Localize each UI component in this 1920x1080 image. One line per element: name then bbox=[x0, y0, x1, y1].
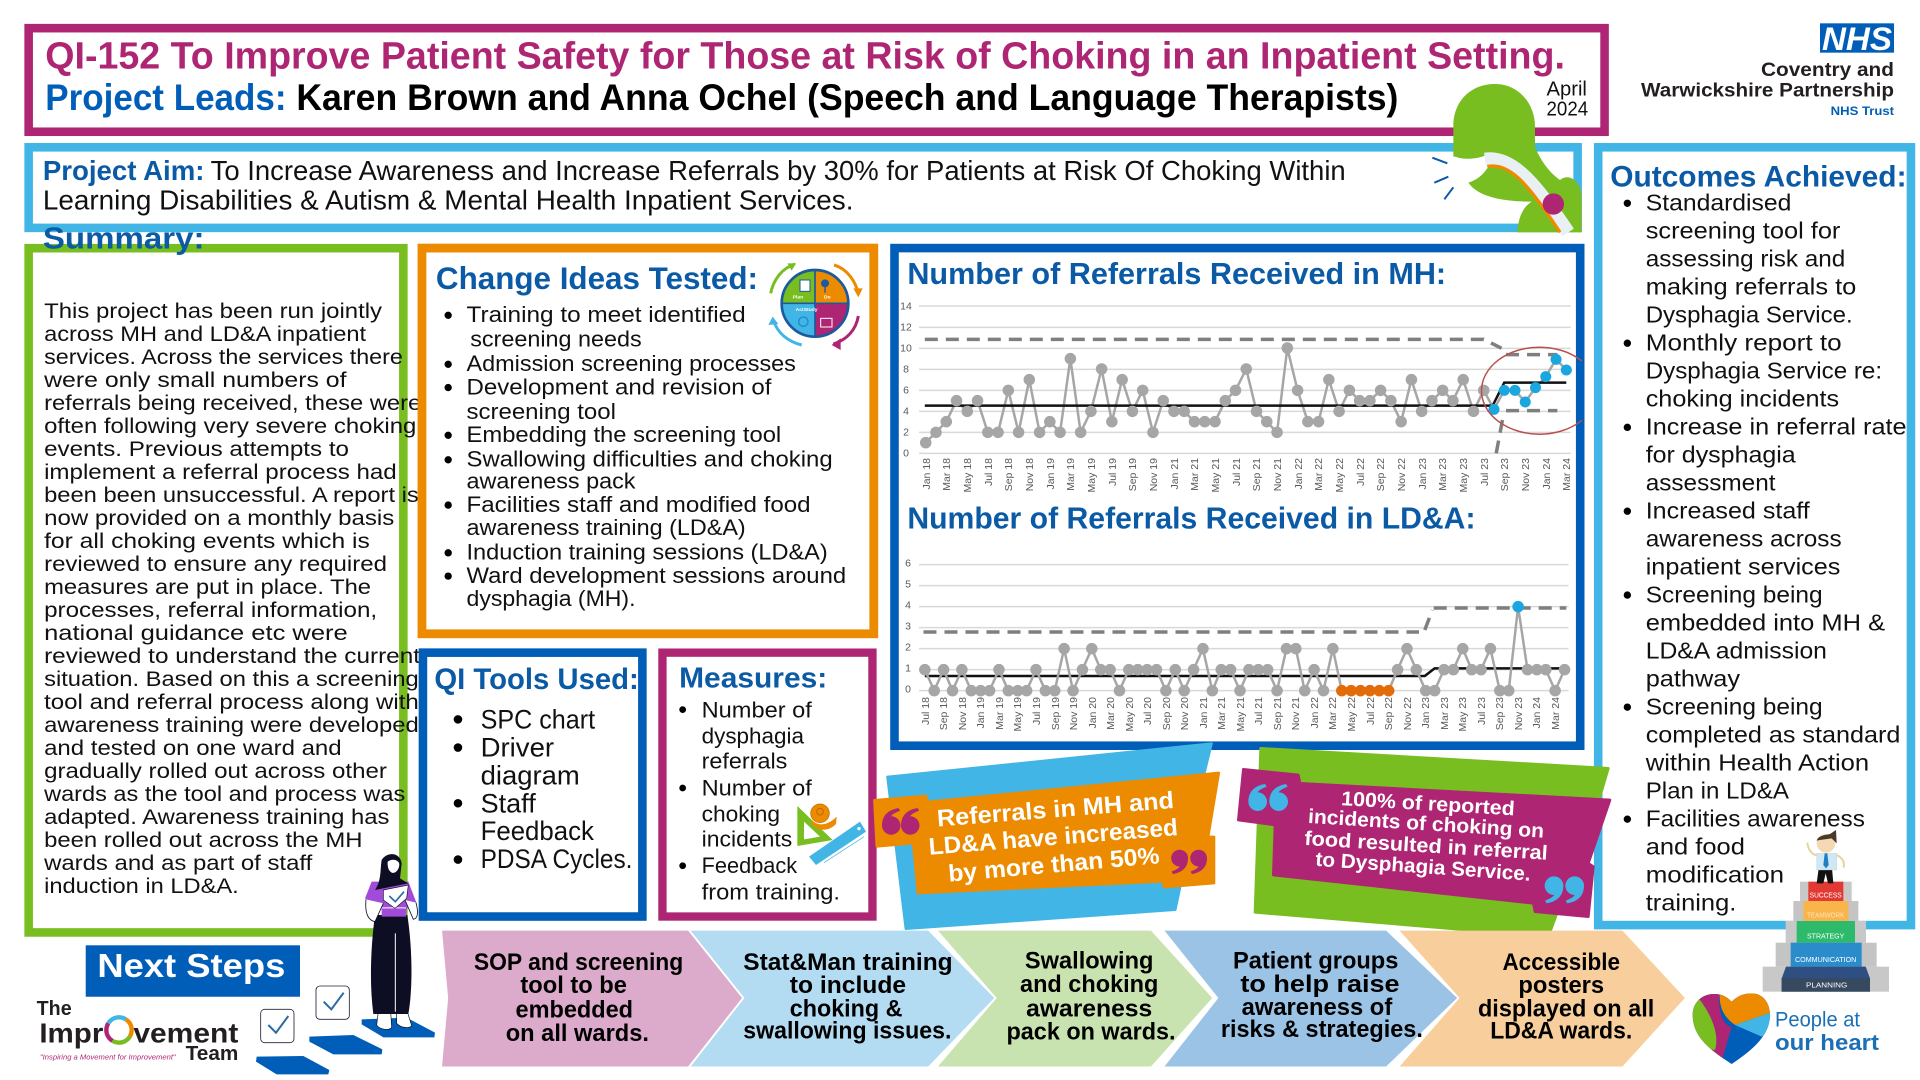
chart: LD&A referrals SPC: Jan 21 bbox=[1198, 697, 1210, 729]
icon: PDSA cycle: ActStudy bbox=[796, 307, 818, 313]
logo: The Improvement Team: vement bbox=[133, 1018, 238, 1049]
chart: MH referrals SPC: Mar 18 bbox=[941, 458, 953, 491]
change ideas list: screening tool bbox=[467, 399, 616, 424]
QI tools list: SPC chart bbox=[481, 705, 596, 735]
outcomes list: Plan in LD&A bbox=[1646, 777, 1789, 803]
outcomes list: within Health Action bbox=[1645, 749, 1869, 775]
chart: LD&A referrals SPC: May 19 bbox=[1012, 697, 1024, 731]
logo: NHS Coventry and Warwickshire Partnership bbox=[1641, 20, 1894, 118]
summary text: now provided on a monthly basis bbox=[44, 506, 394, 530]
change ideas list: awareness pack bbox=[467, 469, 637, 494]
panel: QI tools used bbox=[423, 653, 642, 917]
chart: MH referrals SPC: Mar 21 bbox=[1189, 458, 1201, 491]
outcomes list: completed as standard bbox=[1646, 721, 1900, 747]
chart: LD&A referrals SPC: Jan 20 bbox=[1087, 697, 1099, 729]
chart: MH referrals SPC: Jan 23 bbox=[1417, 458, 1429, 490]
chart: MH referrals SPC: 12 bbox=[900, 322, 912, 334]
summary text: were only small numbers of bbox=[43, 368, 347, 392]
outcomes list: making referrals to bbox=[1646, 274, 1856, 300]
change ideas list: Induction training sessions (LD&A) bbox=[467, 540, 828, 565]
change ideas list: Admission screening processes bbox=[467, 351, 796, 376]
heading: MH chart: Number of Referrals Received in MH: bbox=[907, 257, 1446, 291]
chart: MH referrals SPC: Sep 22 bbox=[1375, 458, 1387, 491]
callout: referrals increased bbox=[875, 743, 1219, 929]
heading: next steps: Next Steps bbox=[97, 948, 285, 985]
chart: LD&A referrals SPC: Mar 19 bbox=[994, 697, 1006, 730]
chart: MH referrals SPC: 6 bbox=[903, 385, 909, 397]
QI tools list: Driver bbox=[481, 733, 554, 763]
heading: next steps bbox=[86, 945, 300, 997]
chart: MH referrals SPC: Mar 24 bbox=[1561, 458, 1573, 491]
summary text: measures are put in place. The bbox=[44, 575, 371, 599]
chevron: accessible posters: posters bbox=[1518, 972, 1604, 999]
illustration: stairs of success with man: TEAMWORK bbox=[1807, 912, 1845, 919]
change ideas list: Ward development sessions around bbox=[467, 563, 846, 588]
chart: LD&A referrals SPC: May 21 bbox=[1235, 697, 1247, 731]
summary text: been rolled out across the MH bbox=[44, 828, 362, 852]
chart: LD&A referrals SPC: Sep 22 bbox=[1383, 697, 1395, 730]
project leads label: Project Leads: bbox=[45, 77, 287, 118]
chart: LD&A referrals SPC: Nov 19 bbox=[1068, 697, 1080, 730]
chart: LD&A referrals SPC: May 22 bbox=[1346, 697, 1358, 731]
chart: MH referrals SPC: Nov 23 bbox=[1520, 458, 1532, 491]
chevron: accessible posters bbox=[1400, 931, 1685, 1067]
chevron: swallowing awareness pack: and choking bbox=[1020, 971, 1158, 998]
chart: LD&A referrals SPC: Nov 21 bbox=[1290, 697, 1302, 730]
measures list: Number of bbox=[702, 775, 813, 800]
summary text: services. Across the services there bbox=[44, 345, 403, 369]
chart: LD&A referrals SPC: 4 bbox=[905, 600, 911, 612]
summary text: referrals being received, these were bbox=[44, 391, 421, 415]
chevron: Stat&Man training: to include bbox=[790, 972, 906, 999]
chevron: swallowing awareness pack bbox=[938, 931, 1212, 1067]
heading: summary: Summary: bbox=[43, 222, 204, 256]
outcomes list: screening tool for bbox=[1646, 218, 1841, 244]
chevron: SOP and screening: tool to be bbox=[520, 972, 627, 999]
summary text: wards and as part of staff bbox=[43, 851, 312, 875]
chart: LD&A referrals SPC: Mar 21 bbox=[1216, 697, 1228, 730]
chevron: SOP and screening: on all wards. bbox=[506, 1020, 649, 1047]
measures list: incidents bbox=[702, 827, 792, 852]
callout: 100% of reported incidents bbox=[1238, 748, 1610, 937]
chart: MH referrals SPC: Nov 21 bbox=[1272, 458, 1284, 491]
measures list: referrals bbox=[702, 749, 787, 774]
summary text: processes, referral information, bbox=[44, 598, 377, 622]
summary text: reviewed to understand the current bbox=[44, 644, 420, 668]
chart: MH referrals SPC bbox=[900, 301, 1598, 492]
heading: QI tools: QI Tools Used: bbox=[434, 663, 639, 696]
icon: PDSA cycle: Plan bbox=[793, 295, 803, 301]
outcomes list: Monthly report to bbox=[1646, 330, 1842, 356]
outcomes list: and food bbox=[1646, 833, 1745, 859]
summary text: tool and referral process along with bbox=[44, 690, 419, 714]
title: QI-152 To Improve Patient Safety for Those at Risk of Choking in an Inpatient Setting. bbox=[45, 36, 1565, 78]
chart: MH referrals SPC: Jan 24 bbox=[1541, 458, 1553, 490]
chart: LD&A referrals SPC: Mar 22 bbox=[1327, 697, 1339, 730]
chevron: patient groups: Patient groups bbox=[1233, 948, 1398, 975]
change ideas list: Facilities staff and modified food bbox=[467, 492, 811, 517]
project leads names: Karen Brown and Anna Ochel (Speech and Language Therapists) bbox=[296, 77, 1398, 118]
chart: MH referrals SPC: May 23 bbox=[1458, 458, 1470, 492]
panel: outcomes achieved bbox=[1598, 147, 1911, 925]
change ideas list: Embedding the screening tool bbox=[467, 422, 781, 447]
measures list bbox=[683, 697, 840, 904]
chart: MH referrals SPC: Jan 22 bbox=[1293, 458, 1305, 490]
QI tools list: PDSA Cycles. bbox=[481, 844, 632, 874]
chart: MH referrals SPC: Nov 19 bbox=[1148, 458, 1160, 491]
illustration: stairs of success with man: STRATEGY bbox=[1807, 931, 1844, 940]
logo: The Improvement Team: "Inspiring a Movement for Improvement" bbox=[40, 1054, 176, 1061]
date: April bbox=[1547, 79, 1587, 101]
summary text: induction in LD&A. bbox=[44, 874, 239, 898]
chart: MH referrals SPC: Jul 18 bbox=[983, 458, 995, 486]
icon: PDSA cycle: Do bbox=[824, 295, 831, 301]
logo: NHS Coventry and Warwickshire Partnership: NHS bbox=[1822, 20, 1892, 57]
outcomes list: Dysphagia Service re: bbox=[1646, 358, 1882, 384]
change ideas list: awareness training (LD&A) bbox=[467, 515, 746, 540]
outcomes list: Increase in referral rate bbox=[1646, 414, 1907, 440]
summary text bbox=[43, 299, 421, 898]
icon: PDSA cycle bbox=[768, 263, 863, 350]
outcomes list bbox=[1627, 190, 1907, 915]
chart: LD&A referrals SPC: 3 bbox=[905, 621, 911, 633]
outcomes list: assessing risk and bbox=[1646, 246, 1845, 272]
chart: LD&A referrals SPC: Jan 23 bbox=[1420, 697, 1432, 729]
heading: change ideas: Change Ideas Tested: bbox=[436, 260, 758, 296]
outcomes list: for dysphagia bbox=[1646, 441, 1796, 467]
chart: LD&A referrals SPC: Sep 19 bbox=[1050, 697, 1062, 730]
chart: MH referrals SPC: Jan 21 bbox=[1169, 458, 1181, 490]
outcomes list: Screening being bbox=[1646, 693, 1823, 719]
date year: 2024 bbox=[1547, 99, 1588, 121]
summary text: been been unsuccessful. A report is bbox=[44, 483, 419, 507]
chart: LD&A referrals SPC: Nov 22 bbox=[1402, 697, 1414, 730]
chevron: swallowing awareness pack: Swallowing bbox=[1025, 948, 1153, 975]
chart: MH referrals SPC: Jan 18 bbox=[921, 458, 933, 490]
chart: MH referrals SPC: Jul 19 bbox=[1107, 458, 1119, 486]
panel: measures bbox=[662, 653, 872, 917]
summary text: situation. Based on this a screening bbox=[44, 667, 419, 691]
chart: MH referrals SPC: Sep 19 bbox=[1127, 458, 1139, 491]
change ideas list: dysphagia (MH). bbox=[467, 586, 636, 611]
heading: LD&A chart: Number of Referrals Received in LD&A: bbox=[907, 501, 1476, 535]
chart: LD&A referrals SPC: 2 bbox=[905, 642, 911, 654]
chart: LD&A referrals SPC: Jul 21 bbox=[1253, 697, 1265, 725]
chart: MH referrals SPC: Mar 23 bbox=[1437, 458, 1449, 491]
summary text: This project has been run jointly bbox=[44, 299, 382, 323]
chevron: Stat&Man training: swallowing issues. bbox=[743, 1017, 951, 1044]
change ideas list bbox=[448, 302, 846, 611]
chart: MH referrals SPC: Sep 18 bbox=[1003, 458, 1015, 491]
chart: MH referrals SPC: May 19 bbox=[1086, 458, 1098, 492]
callout: referrals increased: LD&A have increased bbox=[928, 814, 1179, 861]
callout: referrals increased: by more than 50% bbox=[947, 842, 1161, 888]
chevron: accessible posters: displayed on all bbox=[1478, 995, 1654, 1022]
chart: LD&A referrals SPC: 5 bbox=[905, 579, 911, 591]
callout: referrals increased: Referrals in MH and bbox=[936, 787, 1175, 833]
measures list: dysphagia bbox=[702, 723, 805, 748]
summary text: for all choking events which is bbox=[44, 529, 370, 553]
outcomes list: LD&A admission bbox=[1646, 638, 1827, 664]
heading: outcomes: Outcomes Achieved: bbox=[1610, 161, 1907, 194]
chart: MH referrals SPC: 10 bbox=[900, 343, 912, 355]
callout: 100% of reported incidents: 100% of reported bbox=[1341, 788, 1515, 820]
chart: LD&A referrals SPC: Jan 19 bbox=[975, 697, 987, 729]
chart: MH referrals SPC: 4 bbox=[903, 406, 909, 418]
chart: LD&A referrals SPC: 6 bbox=[905, 558, 911, 570]
chart: LD&A referrals SPC: Jul 22 bbox=[1365, 697, 1377, 725]
callout: 100% of reported incidents: to Dysphagia Service. bbox=[1315, 849, 1531, 886]
summary text: across MH and LD&A inpatient bbox=[44, 322, 366, 346]
chart: LD&A referrals SPC: Jan 22 bbox=[1309, 697, 1321, 729]
logo: The Improvement Team: Team bbox=[186, 1042, 238, 1065]
summary text: gradually rolled out across other bbox=[44, 759, 387, 783]
chevron: Stat&Man training: Stat&Man training bbox=[743, 949, 953, 976]
QI tools list bbox=[458, 705, 632, 874]
measures list: choking bbox=[702, 801, 780, 826]
chevron: Stat&Man training: choking & bbox=[790, 995, 902, 1022]
chart: LD&A referrals SPC bbox=[905, 558, 1569, 731]
chevron: SOP and screening bbox=[442, 931, 742, 1067]
icon: throat with choking hazard bbox=[1432, 84, 1582, 232]
chart: LD&A referrals SPC: Sep 23 bbox=[1494, 697, 1506, 730]
chart: MH referrals SPC: 8 bbox=[903, 364, 909, 376]
QI tools list: diagram bbox=[481, 760, 580, 790]
chart: LD&A referrals SPC: Mar 20 bbox=[1105, 697, 1117, 730]
measures list: Feedback bbox=[702, 853, 798, 878]
illustration: woman on steps with checklist bbox=[256, 854, 435, 1074]
chart: LD&A referrals SPC: May 20 bbox=[1124, 697, 1136, 731]
chevron: patient groups: to help raise bbox=[1240, 971, 1400, 998]
chevron: SOP and screening: embedded bbox=[516, 997, 633, 1024]
chart: MH referrals SPC: May 21 bbox=[1210, 458, 1222, 492]
logo: People at our heart: People at bbox=[1775, 1009, 1860, 1032]
logo: The Improvement Team: Impr bbox=[39, 1018, 103, 1049]
logo: NHS Coventry and Warwickshire Partnership: Coventry and bbox=[1761, 59, 1894, 81]
chevron: SOP and screening: SOP and screening bbox=[474, 949, 683, 976]
chart: LD&A referrals SPC: Nov 20 bbox=[1179, 697, 1191, 730]
chevron: patient groups bbox=[1164, 931, 1457, 1067]
outcomes list: Increased staff bbox=[1646, 498, 1810, 524]
summary text: events. Previous attempts to bbox=[44, 437, 349, 461]
panel: title bbox=[29, 28, 1605, 132]
panel: referral charts bbox=[894, 248, 1580, 746]
chart: LD&A referrals SPC: 0 bbox=[905, 684, 911, 696]
panel: change ideas tested bbox=[422, 248, 874, 634]
aim label: Project Aim: bbox=[43, 155, 204, 186]
change ideas list: Training to meet identified bbox=[467, 302, 746, 327]
aim line 1: To Increase Awareness and Increase Referrals by 30% for Patients at Risk Of Choking Within bbox=[211, 155, 1346, 186]
summary text: often following very severe choking bbox=[44, 414, 416, 438]
icon: ruler and measuring tape bbox=[797, 804, 866, 865]
logo: The Improvement Team bbox=[37, 998, 238, 1065]
chart: LD&A referrals SPC: Nov 23 bbox=[1513, 697, 1525, 730]
QI tools list: Feedback bbox=[481, 816, 594, 846]
chart: MH referrals SPC: Nov 22 bbox=[1396, 458, 1408, 491]
chart: LD&A referrals SPC: Sep 20 bbox=[1161, 697, 1173, 730]
change ideas list: screening needs bbox=[470, 327, 642, 352]
summary text: wards as the tool and process was bbox=[43, 782, 405, 806]
outcomes list: assessment bbox=[1646, 470, 1776, 496]
chart: MH referrals SPC: Sep 21 bbox=[1251, 458, 1263, 491]
outcomes list: training. bbox=[1646, 889, 1736, 915]
chart: LD&A referrals SPC: Jul 20 bbox=[1142, 697, 1154, 725]
chart: LD&A referrals SPC: Sep 18 bbox=[938, 697, 950, 730]
chevron: Stat&Man training bbox=[691, 931, 994, 1067]
illustration: stairs of success with man: COMMUNICATION bbox=[1795, 957, 1856, 964]
logo: People at our heart: our heart bbox=[1775, 1030, 1880, 1055]
illustration: stairs of success with man: SUCCESS bbox=[1810, 892, 1842, 899]
chart: LD&A referrals SPC: 1 bbox=[905, 663, 911, 675]
chart: LD&A referrals SPC: May 23 bbox=[1457, 697, 1469, 731]
outcomes list: Screening being bbox=[1646, 581, 1823, 607]
chart: LD&A referrals SPC: Jul 18 bbox=[920, 697, 932, 725]
chart: LD&A referrals SPC: Mar 24 bbox=[1550, 697, 1562, 730]
measures list: from training. bbox=[702, 879, 840, 904]
chart: LD&A referrals SPC: Nov 18 bbox=[957, 697, 969, 730]
chevron: swallowing awareness pack: pack on wards. bbox=[1007, 1019, 1176, 1046]
chevron: swallowing awareness pack: awareness bbox=[1026, 995, 1152, 1022]
outcomes list: inpatient services bbox=[1646, 554, 1840, 580]
chart: MH referrals SPC: May 18 bbox=[962, 458, 974, 492]
measures list: Number of bbox=[702, 697, 813, 722]
summary text: reviewed to ensure any required bbox=[44, 552, 387, 576]
chevron: patient groups: awareness of bbox=[1242, 994, 1393, 1021]
outcomes list: embedded into MH & bbox=[1646, 609, 1886, 635]
chevron: patient groups: risks & strategies. bbox=[1221, 1016, 1423, 1043]
panel: summary bbox=[29, 222, 421, 932]
chart: MH referrals SPC: Jan 19 bbox=[1045, 458, 1057, 490]
outcomes list: modification bbox=[1646, 861, 1784, 887]
outcomes list: Dysphagia Service. bbox=[1646, 302, 1853, 328]
chart: MH referrals SPC: Mar 22 bbox=[1313, 458, 1325, 491]
chart: MH referrals SPC: Jul 22 bbox=[1355, 458, 1367, 486]
illustration: stairs of success with man bbox=[1763, 830, 1889, 992]
logo: NHS Coventry and Warwickshire Partnership: NHS Trust bbox=[1831, 104, 1894, 118]
outcomes list: choking incidents bbox=[1646, 386, 1839, 412]
summary text: implement a referral process had bbox=[44, 460, 397, 484]
chart: LD&A referrals SPC: Jul 23 bbox=[1476, 697, 1488, 725]
change ideas list: Swallowing difficulties and choking bbox=[467, 447, 833, 472]
logo: The Improvement Team: The bbox=[37, 998, 72, 1020]
chart: LD&A referrals SPC: Mar 23 bbox=[1439, 697, 1451, 730]
logo: People at our heart bbox=[1690, 990, 1880, 1067]
logo: NHS Coventry and Warwickshire Partnership: Warwickshire Partnership bbox=[1641, 80, 1894, 102]
heading: measures: Measures: bbox=[679, 663, 827, 695]
chart: MH referrals SPC: May 22 bbox=[1334, 458, 1346, 492]
summary text: awareness training were developed bbox=[44, 713, 419, 737]
summary text: adapted. Awareness training has bbox=[44, 805, 389, 829]
outcomes list: awareness across bbox=[1646, 525, 1842, 551]
chart: MH referrals SPC: Sep 23 bbox=[1499, 458, 1511, 491]
outcomes list: Standardised bbox=[1646, 190, 1791, 216]
callout: 100% of reported incidents: incidents of choking on bbox=[1307, 806, 1545, 843]
summary text: national guidance etc were bbox=[44, 621, 348, 645]
chart: MH referrals SPC: Jul 21 bbox=[1231, 458, 1243, 486]
summary text: and tested on one ward and bbox=[44, 736, 342, 760]
chart: MH referrals SPC: Jul 23 bbox=[1479, 458, 1491, 486]
change ideas list: Development and revision of bbox=[467, 374, 772, 399]
chart: MH referrals SPC: Mar 19 bbox=[1065, 458, 1077, 491]
callout: 100% of reported incidents: food resulted in referral bbox=[1304, 828, 1548, 865]
aim line 2: Learning Disabilities & Autism & Mental Health Inpatient Services. bbox=[43, 184, 853, 215]
illustration: stairs of success with man: PLANNING bbox=[1806, 981, 1847, 990]
chevron: accessible posters: LD&A wards. bbox=[1490, 1017, 1632, 1044]
QI tools list: Staff bbox=[481, 788, 536, 818]
chart: LD&A referrals SPC: Jul 19 bbox=[1031, 697, 1043, 725]
chevron: accessible posters: Accessible bbox=[1502, 949, 1620, 976]
outcomes list: pathway bbox=[1646, 665, 1740, 691]
panel: project aim bbox=[29, 147, 1578, 228]
chart: LD&A referrals SPC: Sep 21 bbox=[1272, 697, 1284, 730]
chart: LD&A referrals SPC: Jan 24 bbox=[1531, 697, 1543, 729]
chart: MH referrals SPC: 2 bbox=[903, 427, 909, 439]
chart: MH referrals SPC: 0 bbox=[903, 448, 909, 460]
outcomes list: Facilities awareness bbox=[1646, 805, 1865, 831]
chart: MH referrals SPC: Nov 18 bbox=[1024, 458, 1036, 491]
chart: MH referrals SPC: 14 bbox=[900, 301, 912, 313]
